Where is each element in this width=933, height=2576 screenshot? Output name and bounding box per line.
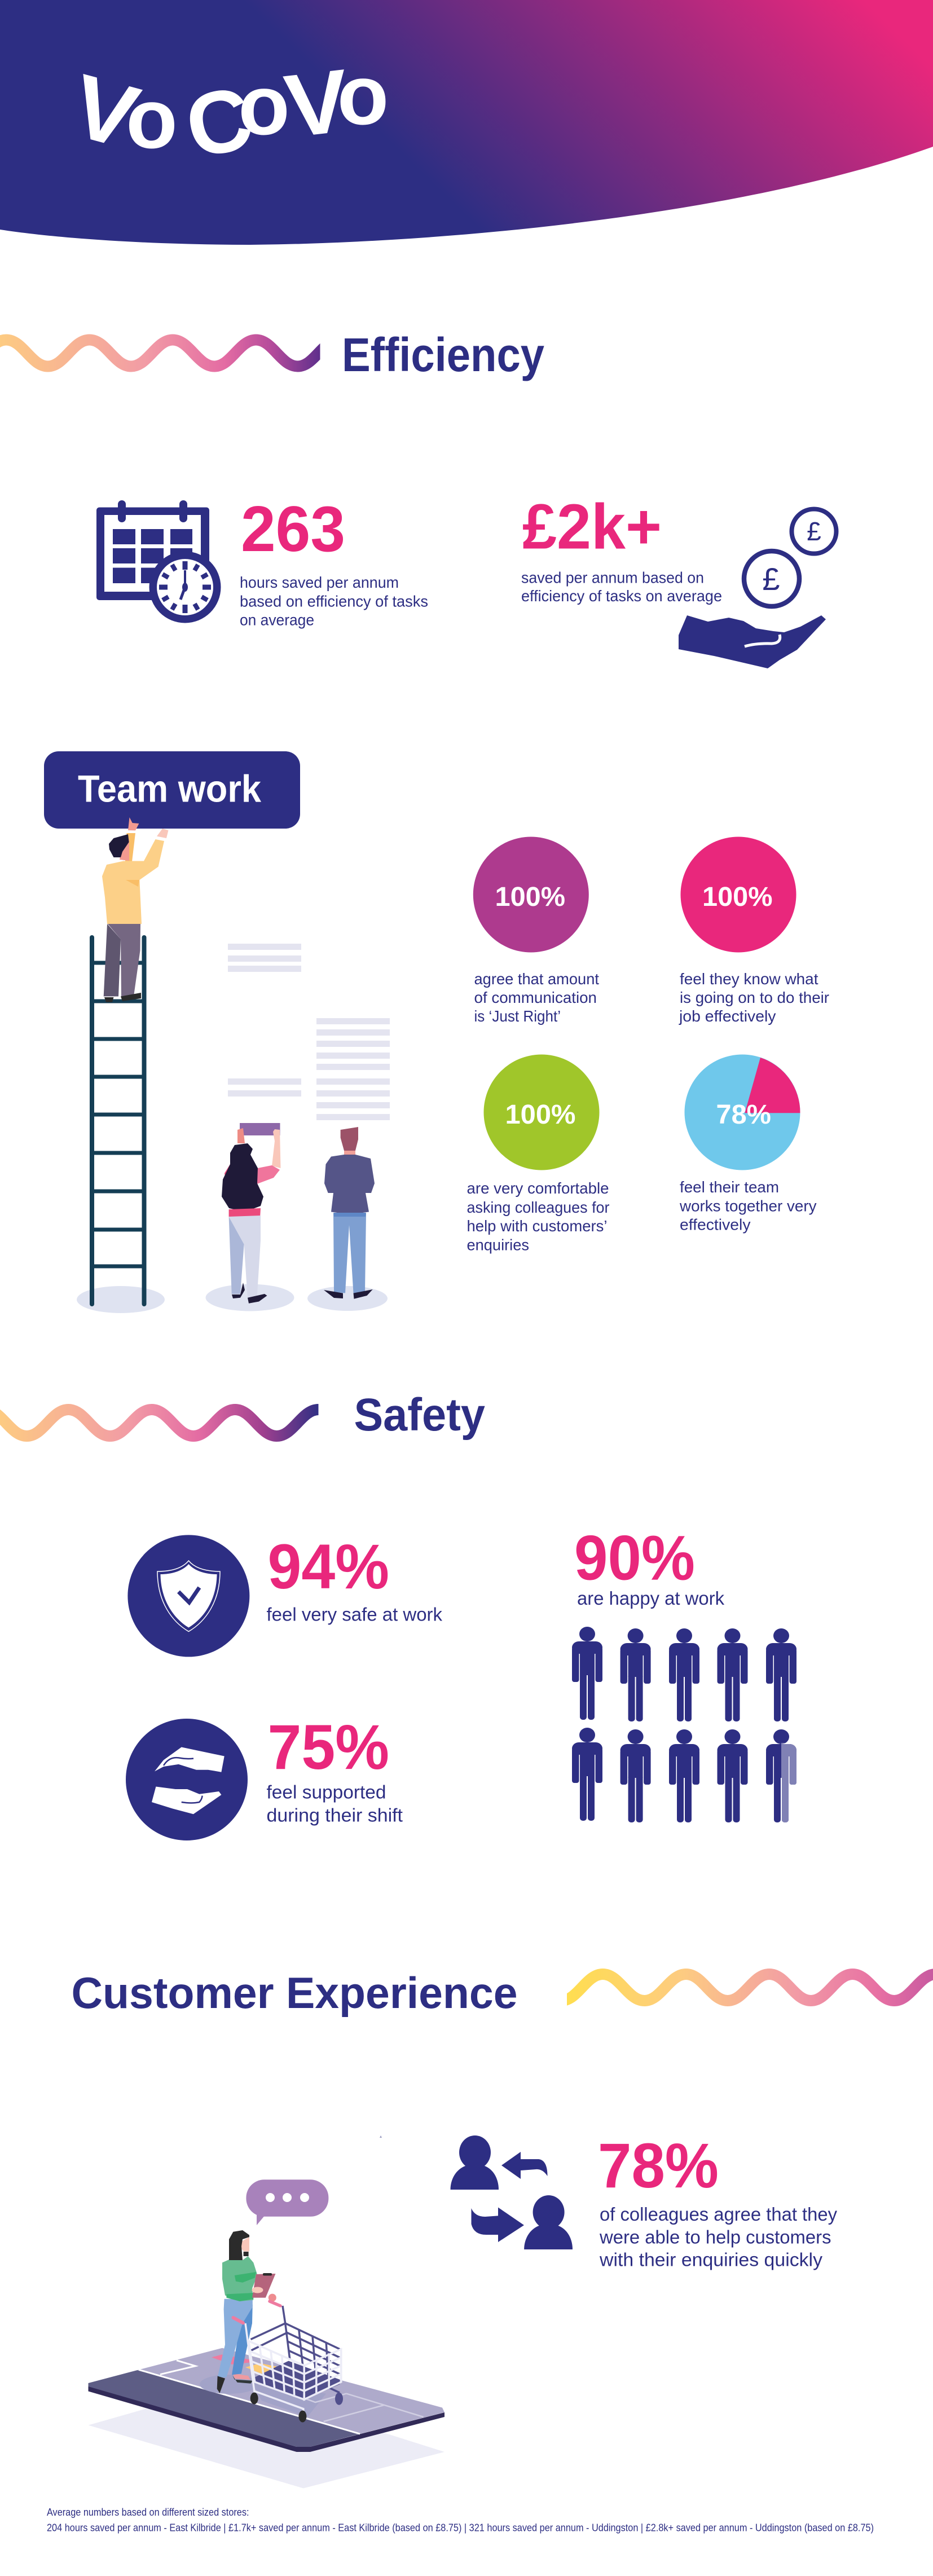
stat circle: 100% know what is going on: 100%	[702, 882, 773, 912]
trolley goods	[255, 2361, 340, 2399]
pictogram: ten people, ninety percent filled	[572, 1627, 796, 1822]
stat: £2k+: efficiency of tasks on average	[521, 587, 722, 605]
logo: VoCoVo	[61, 47, 389, 178]
trolley front	[245, 2323, 341, 2416]
logo: VoCoVo: o	[337, 47, 389, 142]
stat circle: 100% know what is going on: is going on to do their	[680, 989, 829, 1006]
stat: 90% are happy at work: 90%	[574, 1523, 695, 1593]
logo: VoCoVo: C	[177, 68, 261, 178]
wave: efficiency	[0, 340, 339, 367]
heading: Safety: Safety	[354, 1389, 485, 1441]
stat: £2k+: £2k+	[522, 491, 662, 562]
icon: hand with pound coins	[679, 509, 836, 668]
icon: people exchanging messages	[450, 2135, 573, 2249]
icon: calendar with clock	[96, 500, 221, 623]
stat: 78% helped customers: 78%	[598, 2130, 719, 2201]
illustration: shopper with trolley on phone platform	[88, 2135, 445, 2489]
stat: 263 hours: on average	[240, 611, 314, 628]
footnote	[47, 2507, 874, 2534]
man on ladder	[102, 817, 168, 1002]
stat: 78% helped customers: of colleagues agree that they	[600, 2204, 837, 2225]
stat: 75% feel supported: feel supported	[266, 1781, 386, 1803]
footnote: Average numbers based on different sized stores:	[47, 2507, 249, 2518]
logo: VoCoVo: V	[280, 51, 354, 156]
stat circle: 100% communication: is ‘Just Right’	[474, 1007, 561, 1025]
stat circle: 100% know what is going on	[679, 837, 829, 1025]
logo: VoCoVo: V	[61, 56, 148, 168]
platform	[88, 2348, 445, 2452]
header banner	[0, 0, 933, 245]
stat circle: 100% comfortable asking: asking colleagues for	[467, 1199, 609, 1216]
stat circle: 100% communication: agree that amount	[474, 970, 599, 988]
heading: Efficiency: Efficiency	[342, 328, 544, 381]
woman holding sign	[222, 1123, 281, 1304]
stat: 75% feel supported: 75%	[267, 1712, 389, 1782]
shopper	[217, 2230, 280, 2393]
pie chart: 78% team works together	[679, 1055, 817, 1233]
stat: 94% feel very safe	[266, 1531, 442, 1624]
stat circle: 100% comfortable asking	[467, 1055, 609, 1253]
stat: £2k+	[521, 491, 722, 605]
stat circle: 100% know what is going on: feel they know what	[680, 970, 818, 988]
logo: VoCoVo: o	[238, 58, 290, 152]
stat circle: 100% comfortable asking: 100%	[505, 1100, 575, 1130]
icon: shield badge	[127, 1535, 249, 1657]
stat circle: 100% communication: 100%	[495, 882, 565, 912]
pie chart: 78% team works together: works together very	[679, 1197, 817, 1215]
stat: 75% feel supported: during their shift	[266, 1805, 403, 1825]
stat circle: 100% know what is going on: job effectively	[679, 1007, 776, 1025]
pie chart: 78% team works together: effectively	[680, 1216, 750, 1233]
stat: 90% are happy at work: are happy at work	[577, 1588, 724, 1609]
pie chart: 78% team works together: feel their team	[680, 1178, 779, 1196]
stat circle: 100% comfortable asking: help with customers’	[467, 1217, 607, 1235]
stat: 263 hours	[240, 494, 428, 628]
heading: Customer Experience: Customer Experience	[71, 1968, 518, 2018]
stat: 78% helped customers: with their enquiries quickly	[599, 2249, 823, 2270]
icon: supporting hands badge	[126, 1719, 248, 1840]
stat: 78% helped customers	[598, 2130, 837, 2270]
stat: 263 hours: hours saved per annum	[240, 574, 399, 591]
stat: 94% feel very safe: feel very safe at work	[266, 1604, 442, 1624]
heading box: Team work: Team work	[78, 767, 261, 810]
platform shadow	[88, 2409, 445, 2489]
stat: 263 hours: based on efficiency of tasks	[240, 592, 428, 610]
floor shadows	[77, 1284, 388, 1313]
man from behind	[324, 1127, 375, 1299]
wave: safety	[0, 1410, 318, 1436]
wave: customer experience	[520, 1974, 933, 2001]
stat: £2k+: saved per annum based on	[521, 569, 704, 587]
heading box: Team work	[44, 751, 300, 829]
logo: VoCoVo: o	[126, 71, 178, 166]
stat: 94% feel very safe: 94%	[267, 1531, 389, 1602]
illustration: team work people and ladder	[77, 817, 390, 1313]
speech bubble	[246, 2179, 328, 2225]
stat circle: 100% comfortable asking: enquiries	[467, 1236, 529, 1253]
stat: 75% feel supported	[266, 1712, 403, 1825]
stat circle: 100% communication	[473, 837, 599, 1025]
icon: hand with pound coins: £	[762, 561, 780, 597]
ladder	[92, 937, 144, 1304]
stat: 78% helped customers: were able to help customers	[599, 2227, 831, 2247]
stat: 90% are happy at work	[574, 1523, 724, 1609]
stat circle: 100% communication: of communication	[474, 989, 597, 1006]
pie chart: 78% team works together: 78%	[716, 1100, 771, 1130]
stat: 263 hours: 263	[241, 494, 345, 565]
trolley back	[250, 2306, 341, 2393]
icon: hand with pound coins: £	[807, 517, 821, 546]
notice lines	[228, 944, 390, 1120]
stat circle: 100% comfortable asking: are very comfortable	[467, 1179, 609, 1197]
